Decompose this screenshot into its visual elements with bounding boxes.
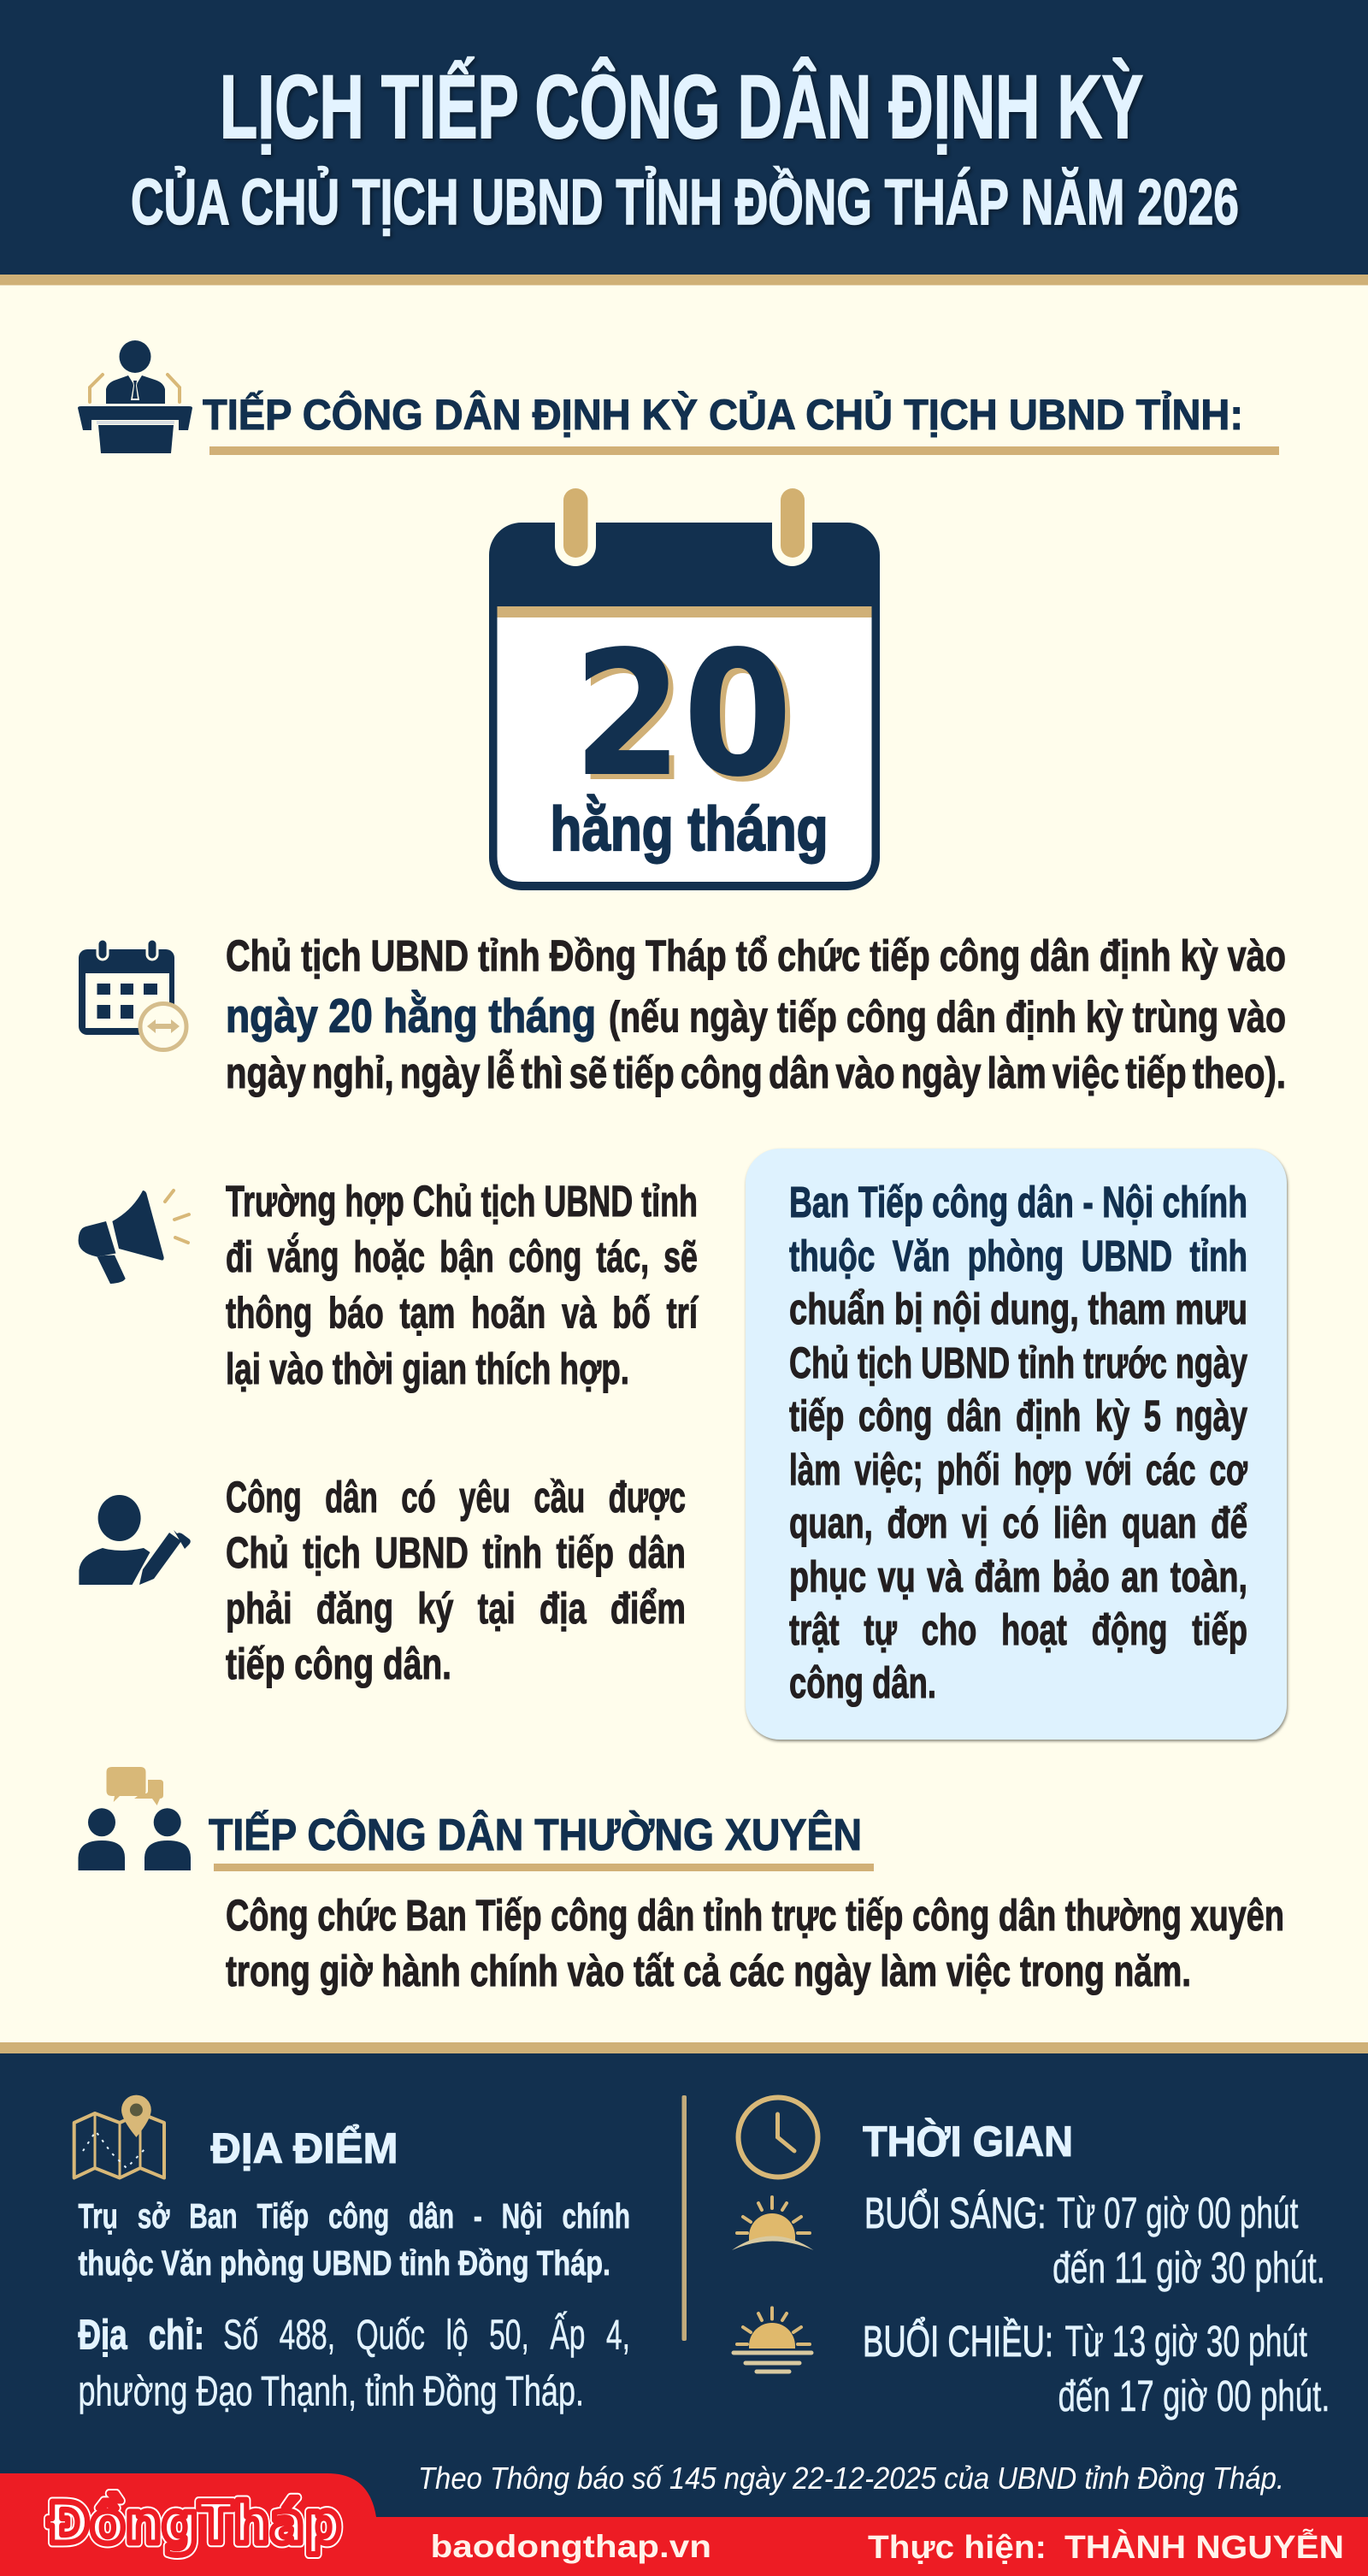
website: baodongthap.vn (431, 2529, 711, 2564)
icon: person with pen (79, 1495, 191, 1585)
paragraph: citizen registration: tiếp công dân. (226, 1640, 451, 1688)
location text (79, 2196, 630, 2415)
time heading: THỜI GIAN (863, 2118, 1073, 2165)
location text: Trụ sở Ban Tiếp công dân - Nội chính (79, 2196, 630, 2236)
icon: speaker at podium (78, 340, 192, 453)
paragraph: postponement: đi vắng hoặc bận công tác, sẽ (226, 1232, 698, 1281)
paragraph: postponement: lại vào thời gian thích hợp. (226, 1344, 629, 1393)
credit: THÀNH NGUYỄN (1064, 2528, 1344, 2566)
title (131, 56, 1239, 238)
calendar: day 20 every month (489, 488, 880, 890)
icon: map with pin (74, 2095, 164, 2177)
credit: Thực hiện: (868, 2530, 1047, 2566)
location text: Số 488, Quốc lộ 50, Ấp 4, (223, 2313, 630, 2359)
paragraph: citizen registration: Chủ tịch UBND tỉnh tiếp dân (226, 1528, 686, 1577)
callout: reception office preparation: công dân. (789, 1658, 936, 1707)
location text: Địa chỉ: (79, 2313, 204, 2359)
paragraph: schedule on the 20th: ngày 20 hằng tháng (226, 989, 596, 1042)
location heading: ĐỊA ĐIỂM (210, 2124, 398, 2172)
source note: Theo Thông báo số 145 ngày 22-12-2025 của UBND tỉnh Đồng Tháp. (418, 2461, 1284, 2496)
morning hours: BUỔI SÁNG: (864, 2188, 1047, 2237)
section heading: periodic reception: TIẾP CÔNG DÂN ĐỊNH KỲ CỦA CHỦ TỊCH UBND TỈNH: (203, 390, 1243, 439)
paragraph: postponement: thông báo tạm hoãn và bố trí (226, 1288, 699, 1338)
morning hours (864, 2188, 1325, 2292)
icon: clock (739, 2097, 817, 2177)
callout: reception office preparation (746, 1149, 1287, 1740)
icon: calendar with arrows (79, 939, 186, 1050)
icon: morning sun (732, 2197, 814, 2250)
paragraph: citizen registration (226, 1473, 686, 1688)
icon: afternoon sun (734, 2307, 811, 2372)
afternoon hours (863, 2316, 1330, 2420)
location text: thuộc Văn phòng UBND tỉnh Đồng Tháp. (79, 2243, 610, 2283)
credit (868, 2528, 1344, 2566)
calendar: day 20 every month: 20 (573, 613, 793, 815)
paragraph: citizen registration: phải đăng ký tại địa điểm (226, 1584, 686, 1633)
paragraph: schedule on the 20th (226, 931, 1286, 1097)
vertical divider (682, 2095, 687, 2341)
paragraph: postponement: Trường hợp Chủ tịch UBND tỉnh (226, 1177, 698, 1226)
paragraph: regular reception hours (226, 1891, 1284, 1995)
calendar: day 20 every month: 20 (578, 618, 798, 820)
paragraph: citizen registration: Công dân có yêu cầu được (226, 1473, 686, 1521)
footer panel (0, 2042, 1368, 2576)
icon: megaphone (79, 1191, 189, 1284)
logo: Dong Thap: ĐồngTháp (47, 2490, 341, 2556)
paragraph: postponement (226, 1177, 699, 1393)
logo: Dong Thap: ĐồngTháp (47, 2490, 341, 2556)
section heading: regular reception: TIẾP CÔNG DÂN THƯỜNG XUYÊN (209, 1810, 862, 1860)
calendar: day 20 every month: hằng tháng (551, 795, 828, 864)
icon: two people talking (79, 1767, 191, 1870)
header band (0, 0, 1368, 286)
location text: phường Đạo Thạnh, tỉnh Đồng Tháp. (79, 2369, 584, 2415)
footer red bar (0, 2473, 1368, 2576)
afternoon hours: BUỔI CHIỀU: (863, 2316, 1053, 2366)
